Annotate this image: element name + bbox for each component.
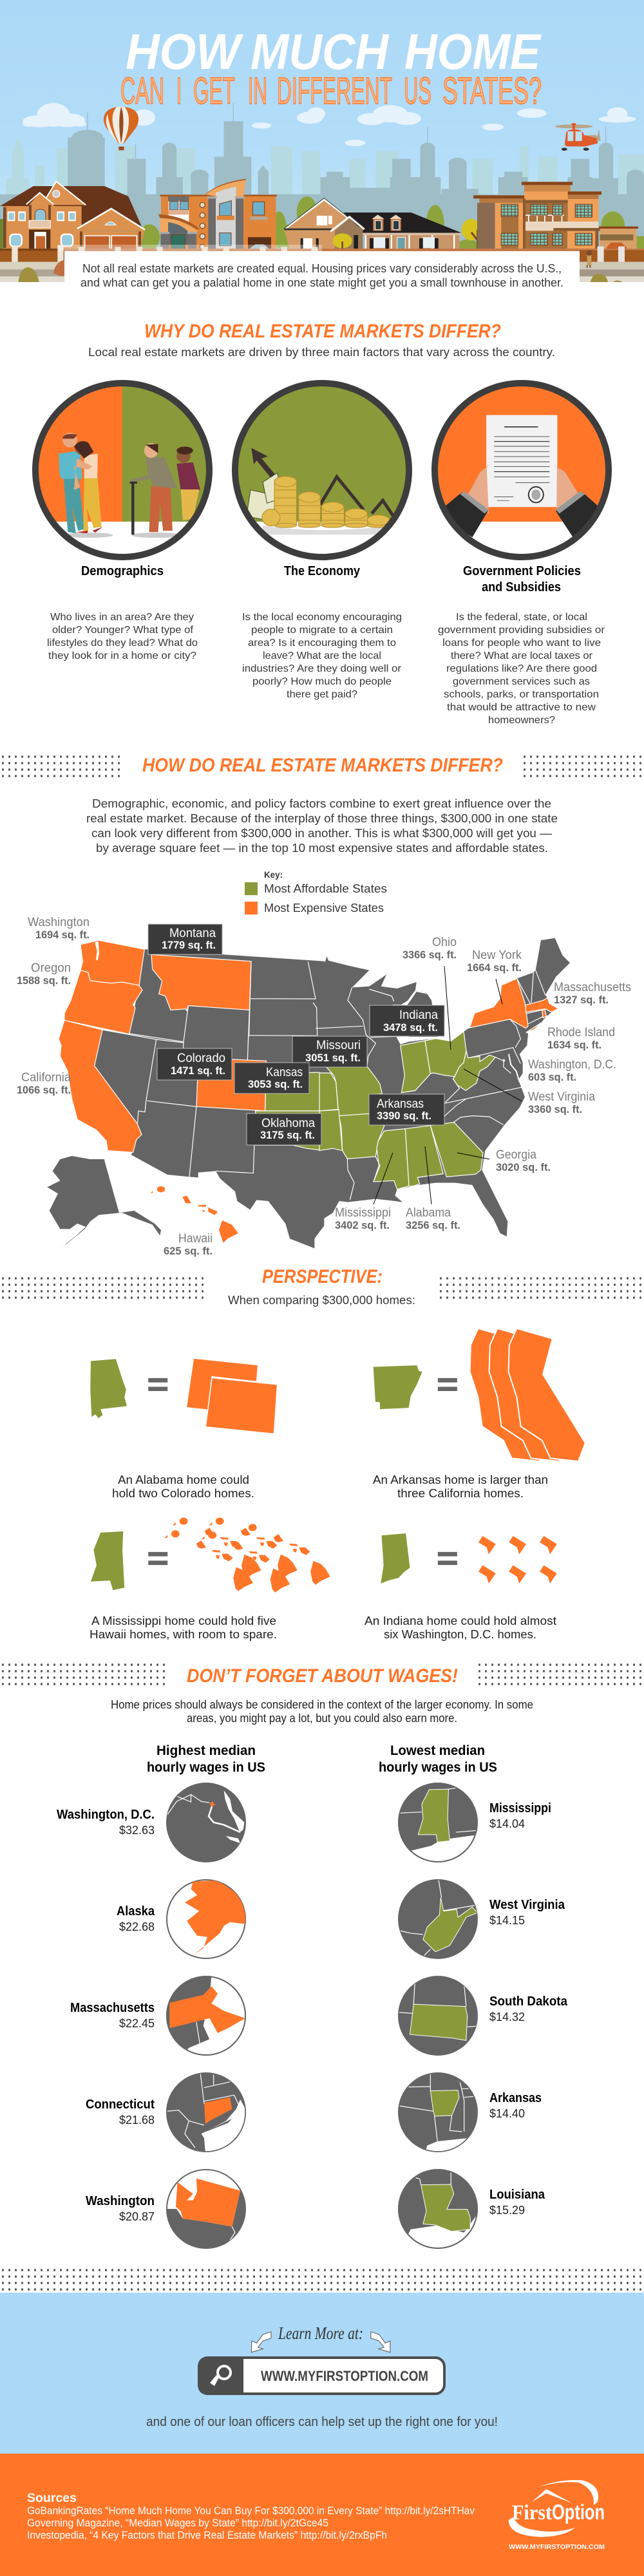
text: demographics: lifestyles do they lead? What do bbox=[47, 638, 198, 649]
callout: Arkansas bbox=[369, 1094, 444, 1125]
wage: Washington: $20.87 bbox=[119, 2210, 155, 2223]
wage: Louisiana: Louisiana bbox=[489, 2188, 545, 2202]
fence and road bbox=[0, 245, 644, 282]
intro panel: Not all real estate markets are created equal. Housing prices vary considerably across the U.S., bbox=[82, 261, 562, 275]
callout: Oklahoma bbox=[247, 1113, 321, 1145]
house 1 garage bbox=[77, 209, 145, 251]
sources list bbox=[27, 2505, 475, 2541]
map labels: Massachusetts bbox=[554, 981, 631, 994]
logo bbox=[509, 2480, 605, 2551]
map legend: Key: bbox=[264, 869, 283, 880]
map: US states bbox=[17, 916, 631, 1257]
wage: South Dakota: $14.32 bbox=[489, 2011, 525, 2023]
panel: Mississippi vs Hawaii bbox=[90, 1518, 330, 1641]
callout: Montana: 1779 sq. ft. bbox=[162, 939, 216, 951]
intro panel: and what can get you a palatial home in one state might get you a small townhouse in another. bbox=[80, 276, 564, 289]
hot air balloon bbox=[104, 107, 138, 150]
map labels: 1634 sq. ft. bbox=[547, 1039, 601, 1051]
subtitle: CAN bbox=[120, 70, 164, 112]
heading: perspective: PERSPECTIVE: bbox=[262, 1266, 383, 1287]
leader lines bbox=[374, 966, 522, 1204]
text: government: government providing subsidies or bbox=[438, 625, 605, 636]
house 4 bbox=[473, 182, 638, 253]
subtitle: GET bbox=[193, 70, 235, 112]
text: economy: Is the local economy encouraging bbox=[242, 612, 402, 623]
eastern affordable states bbox=[319, 1032, 495, 1189]
wage: Washington, D.C.: $32.63 bbox=[119, 1824, 155, 1837]
eastern borders bbox=[319, 971, 545, 1200]
western expensive states bbox=[59, 940, 266, 1152]
search bar: WWW.MYFIRSTOPTION.COM bbox=[261, 2368, 428, 2384]
sources heading: Sources bbox=[27, 2492, 77, 2505]
callout: Missouri bbox=[292, 1036, 367, 1067]
wage: Louisiana: $15.29 bbox=[489, 2204, 525, 2217]
panel: Arkansas vs California bbox=[373, 1329, 585, 1500]
callout: Indiana: 3478 sq. ft. bbox=[383, 1021, 438, 1034]
panel: demographics bbox=[32, 380, 213, 661]
text: economy: leave? What are the local bbox=[263, 650, 381, 661]
title: HOW bbox=[126, 23, 244, 80]
wage: Mississippi: $14.04 bbox=[489, 1817, 525, 1830]
map labels: Alabama bbox=[406, 1206, 451, 1220]
lower michigan bbox=[407, 992, 438, 1037]
intro panel bbox=[64, 251, 580, 290]
eastern expensive states bbox=[469, 978, 558, 1061]
panel: Alabama equals Colorado: hold two Colorado homes. bbox=[112, 1487, 254, 1500]
heading: highest wages: Highest median bbox=[156, 1743, 256, 1758]
sources list: Governing Magazine, “Median Wages by State” http://bit.ly/2tGce45 bbox=[27, 2517, 328, 2529]
map labels: 3366 sq. ft. bbox=[402, 949, 457, 961]
cta text: and one of our loan officers can help set up the right one for you! bbox=[146, 2415, 498, 2429]
subtitle bbox=[120, 70, 542, 112]
logo: WWW.MYFIRSTOPTION.COM bbox=[509, 2543, 605, 2551]
heading: government: Government Policies bbox=[463, 564, 581, 578]
wage: Washington: Washington bbox=[86, 2194, 155, 2208]
wage: Mississippi: Mississippi bbox=[489, 1801, 551, 1815]
panel: Alabama equals Colorado: An Alabama home could bbox=[118, 1473, 249, 1486]
heading: lowest wages bbox=[379, 1743, 497, 1775]
sources list: GoBankingRates “Home Much Home You Can Buy For $300,000 in Every State” http://bit.ly/2sHTHav bbox=[27, 2505, 475, 2517]
map labels: West Virginia bbox=[528, 1090, 595, 1104]
text: how: Demographic, economic, and policy factors combine to exert great influence over the bbox=[92, 797, 551, 810]
sources list: Investopedia, “4 Key Factors that Drive Real Estate Markets” http://bit.ly/2rxBpFh bbox=[27, 2529, 387, 2541]
heading: lowest wages: hourly wages in US bbox=[379, 1760, 497, 1775]
western borders bbox=[102, 961, 324, 1177]
icon: document in hands bbox=[431, 380, 612, 560]
wage: Massachusetts: $22.45 bbox=[119, 2017, 155, 2030]
text: how: by average square feet — in the top 10 most expensive states and affordable states. bbox=[96, 841, 548, 855]
wage: Washington bbox=[86, 2170, 249, 2249]
text: economy: people to migrate to a certain bbox=[251, 625, 393, 636]
wage: Alaska bbox=[117, 1880, 247, 1958]
map labels: Hawaii bbox=[178, 1232, 213, 1245]
callout: Kansas: 3053 sq. ft. bbox=[248, 1078, 303, 1090]
heading: lowest wages: Lowest median bbox=[390, 1743, 485, 1758]
callout: Kansas: Kansas bbox=[266, 1066, 303, 1079]
title: HOME bbox=[404, 23, 542, 80]
map labels: 3020 sq. ft. bbox=[496, 1161, 551, 1173]
text: economy: industries? Are they doing well or bbox=[242, 663, 402, 674]
map labels: 1664 sq. ft. bbox=[467, 961, 522, 974]
wage: West Virginia bbox=[398, 1879, 565, 1959]
wage: West Virginia: West Virginia bbox=[489, 1898, 565, 1912]
text: how: real estate market. Because of the interplay of those three things, $300,000 in one state bbox=[86, 811, 558, 825]
wage: South Dakota bbox=[398, 1976, 568, 2056]
callout: Indiana bbox=[370, 1005, 444, 1036]
heading: highest wages bbox=[147, 1743, 265, 1775]
wage: Alaska: Alaska bbox=[117, 1904, 155, 1918]
text: government: homeowners? bbox=[488, 715, 555, 726]
callout: Kansas bbox=[234, 1063, 309, 1094]
heading: how: HOW DO REAL ESTATE MARKETS DIFFER? bbox=[142, 755, 503, 776]
icon: magnifier bbox=[210, 2366, 231, 2386]
callout: Missouri: 3051 sq. ft. bbox=[305, 1052, 361, 1064]
wage: Washington, D.C.: Washington, D.C. bbox=[57, 1808, 155, 1822]
callout: Montana: Montana bbox=[169, 927, 216, 940]
panel: government bbox=[431, 380, 612, 726]
text: government: there? What are local taxes or bbox=[451, 650, 593, 661]
map labels bbox=[17, 916, 631, 1257]
house 1 bbox=[0, 181, 142, 251]
subheading: perspective: When comparing $300,000 homes: bbox=[228, 1293, 415, 1307]
distant ridge and trees bbox=[0, 194, 317, 250]
search bar bbox=[198, 2356, 444, 2395]
map legend: Most Affordable States bbox=[264, 882, 387, 895]
trees behind right houses bbox=[426, 205, 644, 252]
map labels: 3256 sq. ft. bbox=[406, 1219, 460, 1231]
wage: Mississippi bbox=[398, 1783, 551, 1863]
heading: government bbox=[463, 564, 581, 594]
skyline back bbox=[6, 137, 644, 251]
panel: Indiana vs D.C. bbox=[365, 1533, 557, 1641]
subtitle: STATES? bbox=[442, 70, 542, 112]
text: government: Is the federal, state, or local bbox=[456, 612, 587, 623]
heading: government: and Subsidies bbox=[482, 580, 561, 594]
wage: Alaska: $22.68 bbox=[119, 1920, 155, 1933]
subtitle: DIFFERENT bbox=[277, 70, 392, 112]
title: MUCH bbox=[251, 23, 390, 80]
map legend: Most Expensive States bbox=[264, 902, 384, 914]
text: government: loans for people who want to live bbox=[442, 638, 601, 649]
map legend bbox=[245, 869, 387, 914]
map labels: Washington, D.C. bbox=[528, 1058, 616, 1072]
logo: First bbox=[512, 2501, 552, 2524]
text: wages: areas, you might pay a lot, but you could also earn more. bbox=[187, 1712, 457, 1725]
text: economy: area? Is it encouraging them to bbox=[248, 638, 396, 649]
text: government: that would be attractive to new bbox=[447, 702, 596, 713]
subtitle: I bbox=[176, 70, 182, 112]
subtitle: US bbox=[404, 70, 431, 112]
callout: Indiana: Indiana bbox=[399, 1009, 438, 1022]
text: economy: poorly? How much do people bbox=[252, 676, 392, 687]
icon: arrows bbox=[251, 2332, 390, 2353]
map labels: 1066 sq. ft. bbox=[17, 1084, 71, 1096]
learn more script: Learn More at: bbox=[278, 2324, 363, 2343]
title bbox=[126, 23, 542, 80]
wage: Connecticut: $21.68 bbox=[119, 2114, 155, 2126]
panel: Alabama equals Colorado bbox=[90, 1359, 277, 1500]
map labels: California bbox=[21, 1071, 71, 1084]
wage: Massachusetts bbox=[70, 1975, 249, 2056]
panel: Indiana vs D.C.: An Indiana home could hold almost bbox=[365, 1615, 556, 1627]
panel: Mississippi vs Hawaii: A Mississippi home could hold five bbox=[91, 1615, 276, 1627]
map labels: 625 sq. ft. bbox=[164, 1245, 213, 1257]
map labels: New York bbox=[472, 949, 522, 962]
wage: Arkansas bbox=[398, 2072, 542, 2153]
callout: Arkansas: Arkansas bbox=[377, 1097, 424, 1111]
text: economy bbox=[242, 612, 402, 700]
wage: Massachusetts: Massachusetts bbox=[70, 2001, 155, 2015]
helicopter bbox=[555, 123, 600, 151]
map labels: Georgia bbox=[496, 1148, 536, 1162]
map labels: 603 sq. ft. bbox=[528, 1071, 576, 1083]
map labels: Oregon bbox=[31, 961, 71, 975]
callout: Colorado bbox=[157, 1048, 232, 1080]
text: wages: Home prices should always be considered in the context of the larger economy. In some bbox=[111, 1698, 533, 1711]
wage: South Dakota: South Dakota bbox=[489, 1994, 568, 2009]
house 2 bbox=[158, 179, 277, 251]
wage: Arkansas: $14.40 bbox=[489, 2107, 525, 2120]
wage: Connecticut: Connecticut bbox=[86, 2098, 155, 2112]
text: how: can look very different from $300,000 in another. This is what $300,000 will get you — bbox=[91, 826, 553, 840]
hawaii bbox=[150, 1186, 238, 1243]
text: how bbox=[86, 797, 558, 855]
map labels: 3360 sq. ft. bbox=[528, 1103, 582, 1115]
text: demographics bbox=[47, 612, 198, 661]
text: economy: there get paid? bbox=[287, 689, 357, 700]
yellow trees bbox=[333, 218, 494, 251]
callout: Missouri: Missouri bbox=[316, 1039, 361, 1052]
callout: Colorado: Colorado bbox=[177, 1052, 225, 1065]
heading: highest wages: hourly wages in US bbox=[147, 1760, 265, 1775]
text: government: regulations like? Are there good bbox=[446, 663, 597, 674]
heading: economy: The Economy bbox=[284, 564, 361, 578]
wage: Louisiana bbox=[398, 2169, 545, 2249]
icon: coins and growth arrow bbox=[232, 380, 412, 560]
text: demographics: Who lives in an area? Are they bbox=[50, 612, 194, 623]
panel: Mississippi vs Hawaii: Hawaii homes, with room to spare. bbox=[90, 1628, 277, 1641]
wage: Connecticut bbox=[86, 2072, 249, 2153]
callout: Colorado: 1471 sq. ft. bbox=[171, 1065, 225, 1077]
wage: West Virginia: $14.15 bbox=[489, 1914, 525, 1927]
western affordable states bbox=[256, 1072, 324, 1151]
heading: why: WHY DO REAL ESTATE MARKETS DIFFER? bbox=[144, 321, 501, 342]
callout: Oklahoma: 3175 sq. ft. bbox=[260, 1129, 315, 1141]
heading: wages: DON’T FORGET ABOUT WAGES! bbox=[187, 1665, 458, 1687]
panel: Arkansas vs California: An Arkansas home is larger than bbox=[373, 1473, 548, 1486]
panel: Indiana vs D.C.: six Washington, D.C. homes. bbox=[384, 1628, 536, 1641]
text: demographics: older? Younger? What type of bbox=[52, 625, 194, 636]
map labels: Mississippi bbox=[335, 1206, 391, 1220]
callout: Arkansas: 3390 sq. ft. bbox=[377, 1110, 431, 1122]
skyline front bbox=[0, 103, 644, 252]
wage: Arkansas: Arkansas bbox=[489, 2091, 542, 2105]
footer CTA panel bbox=[0, 2293, 644, 2454]
subtitle: IN bbox=[248, 70, 267, 112]
subheading: why: Local real estate markets are driven by three main factors that vary across the country. bbox=[88, 345, 555, 359]
callout: Oklahoma: Oklahoma bbox=[261, 1117, 315, 1130]
clouds bbox=[23, 103, 636, 146]
text: government: government services such as bbox=[453, 676, 590, 687]
map labels: Washington bbox=[28, 916, 90, 929]
map labels: 1694 sq. ft. bbox=[35, 929, 90, 941]
callout: Montana bbox=[148, 924, 222, 954]
footer sources panel bbox=[0, 2454, 644, 2576]
text: government: schools, parks, or transportation bbox=[444, 689, 599, 700]
map labels: Ohio bbox=[432, 936, 457, 949]
alaska bbox=[47, 1156, 161, 1253]
icon: people circle bbox=[32, 380, 213, 560]
house 3 bbox=[284, 198, 462, 251]
map labels: 1588 sq. ft. bbox=[17, 974, 71, 987]
heading: demographics: Demographics bbox=[81, 564, 164, 578]
map labels: Rhode Island bbox=[547, 1026, 615, 1039]
hero illustration bbox=[0, 0, 644, 282]
text: demographics: they look for in a home or city? bbox=[48, 650, 196, 661]
panel: economy bbox=[232, 380, 412, 700]
wage: Washington, D.C. bbox=[57, 1783, 246, 1862]
panel: Arkansas vs California: three California homes. bbox=[397, 1487, 524, 1500]
map labels: 1327 sq. ft. bbox=[554, 994, 609, 1006]
text: wages bbox=[111, 1698, 533, 1725]
logo: Option bbox=[552, 2500, 605, 2524]
map labels: 3402 sq. ft. bbox=[335, 1219, 390, 1231]
text: government bbox=[438, 612, 605, 726]
